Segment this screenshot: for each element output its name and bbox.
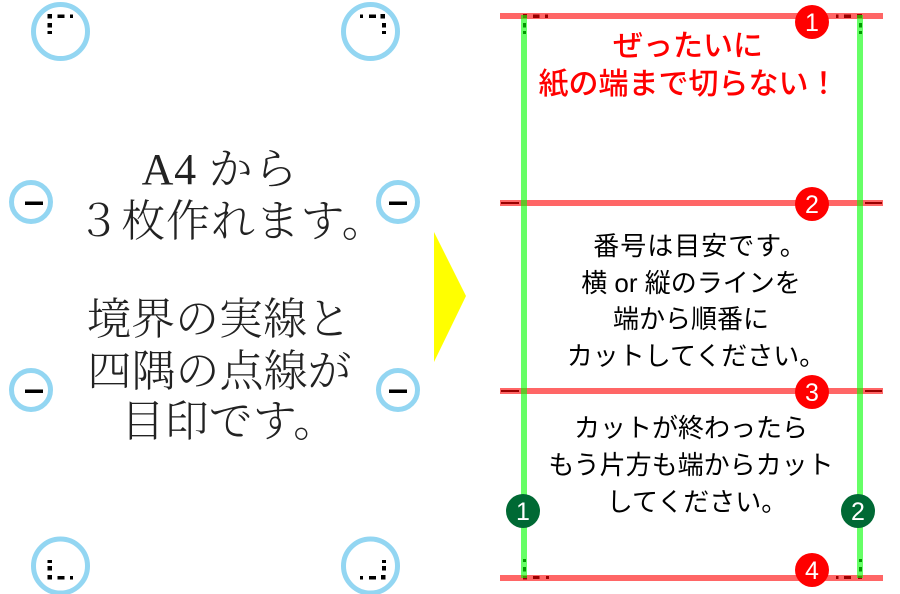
badge: red 1 [795, 5, 829, 39]
badge: red 2: 2 [805, 191, 819, 219]
badge: green 2: 2 [851, 498, 865, 526]
badge: red 1: 1 [805, 9, 819, 37]
text block: cut guide explanation: 四隅の点線が [88, 347, 352, 396]
text block: second direction note [548, 413, 834, 517]
heading: warning [538, 30, 838, 101]
text block: numbering note: 横 or 縦のラインを [581, 268, 801, 298]
icon: bottom-left corner marker [34, 539, 88, 593]
text block: numbering note: 番号は目安です。 [593, 231, 807, 261]
badge: red 4 [795, 553, 829, 587]
heading: warning: 紙の端まで切らない！ [538, 68, 838, 101]
heading: warning: ぜったいに [613, 30, 763, 63]
text block: second direction note: もう片方も端からカット [548, 450, 834, 480]
text block: second direction note: してください。 [607, 487, 787, 517]
text block: numbering note: 端から順番に [613, 304, 769, 334]
icon: middle-right lower dash marker [378, 370, 418, 410]
text block: sheet count: ３枚作れます。 [76, 197, 387, 246]
text block: sheet count [76, 145, 387, 246]
icon: top-left corner marker [34, 4, 88, 58]
badge: red 3: 3 [805, 379, 819, 407]
badge: red 2 [795, 187, 829, 221]
text block: numbering note: カットしてください。 [567, 341, 825, 371]
icon: middle-left upper dash marker [12, 182, 50, 222]
cut sheet diagram [500, 13, 883, 581]
icon: middle-left lower dash marker [12, 370, 50, 410]
badge: green 1: 1 [516, 498, 530, 526]
badge: green 1 [506, 494, 540, 528]
icon: top-right corner marker [344, 4, 398, 58]
icon: bottom-right corner marker [344, 539, 398, 593]
text block: numbering note [567, 231, 825, 371]
badge: red 4: 4 [805, 557, 819, 585]
text block: cut guide explanation: 境界の実線と [87, 295, 351, 344]
text block: cut guide explanation [87, 295, 352, 446]
text block: second direction note: カットが終わったら [574, 413, 808, 443]
badge: green 2 [841, 494, 875, 528]
icon: middle-right upper dash marker [378, 182, 418, 222]
arrow: yellow triangle [434, 232, 466, 362]
text block: sheet count: A4 から [142, 145, 298, 194]
text block: cut guide explanation: 目印です。 [121, 397, 337, 446]
badge: red 3 [795, 375, 829, 409]
